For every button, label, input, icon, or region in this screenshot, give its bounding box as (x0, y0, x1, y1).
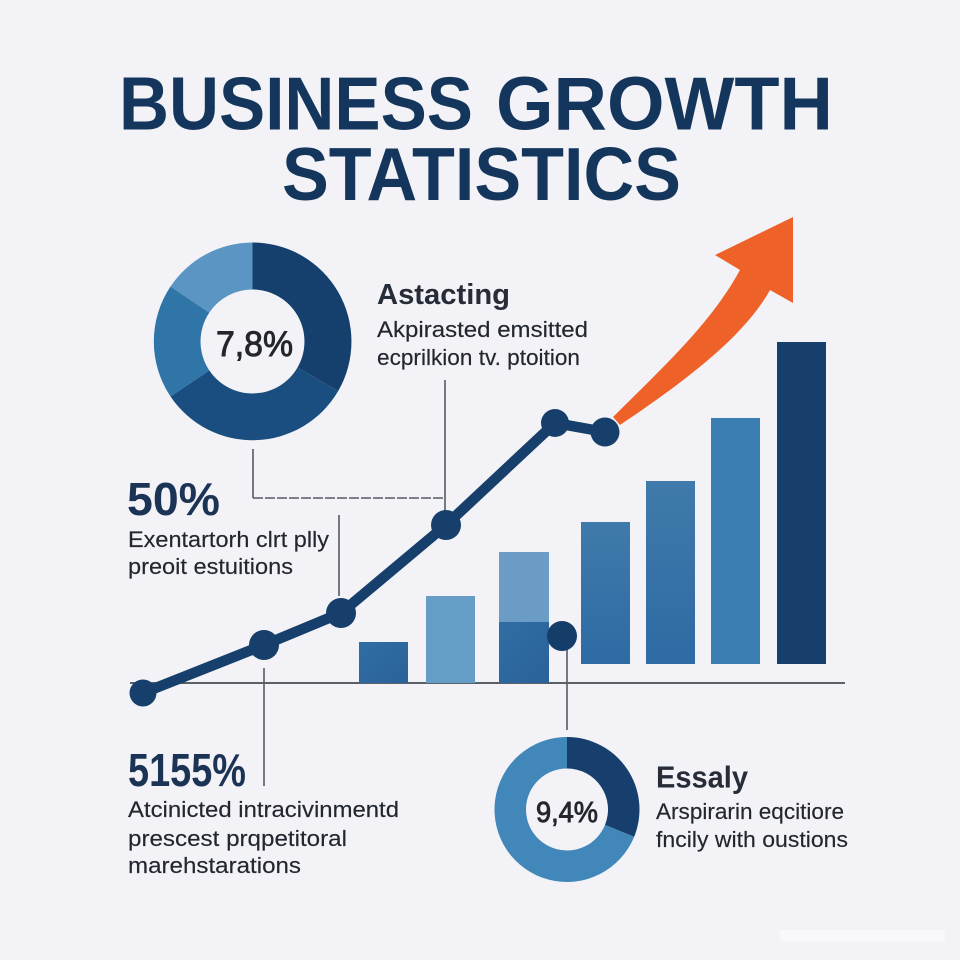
donut chart: 7,8% (154, 242, 351, 440)
text block: 50% (127, 473, 329, 579)
text block: 5155%: Atcinicted intracivinmentd (128, 797, 399, 822)
text block: Essaly: fncily with oustions (656, 827, 848, 852)
text block: Astacting: Akpirasted emsitted (377, 317, 588, 342)
text block: Essaly (656, 760, 848, 852)
text block: Astacting: Astacting (377, 279, 510, 311)
title: GROWTH (496, 62, 833, 146)
text block: Astacting: ecprilkion tv. ptoition (377, 345, 580, 370)
text block: 5155%: marehstarations (128, 853, 301, 878)
text block: 50%: preoit estuitions (128, 554, 293, 579)
text block: Essaly: Arspirarin eqcitiore (656, 799, 844, 824)
connector lines (253, 380, 567, 786)
title: BUSINESS (119, 62, 473, 146)
text block: 50%: 50% (127, 473, 220, 525)
donut chart: 9,4% (494, 737, 639, 882)
line chart (130, 409, 620, 706)
text block: 5155% (128, 744, 399, 878)
text block: 5155%: 5155% (128, 744, 246, 796)
text block: 5155%: prescest prqpetitoral (128, 826, 347, 851)
text block: Essaly: Essaly (656, 760, 749, 794)
bar chart (130, 342, 845, 683)
text block: Astacting (377, 279, 588, 370)
title: STATISTICS (282, 132, 681, 216)
arrow: growth (613, 217, 793, 425)
axis (130, 682, 845, 684)
title (119, 62, 833, 216)
text block: 50%: Exentartorh clrt plly (128, 527, 329, 552)
donut value: 9,4% (536, 797, 598, 829)
donut value: 7,8% (216, 325, 293, 364)
